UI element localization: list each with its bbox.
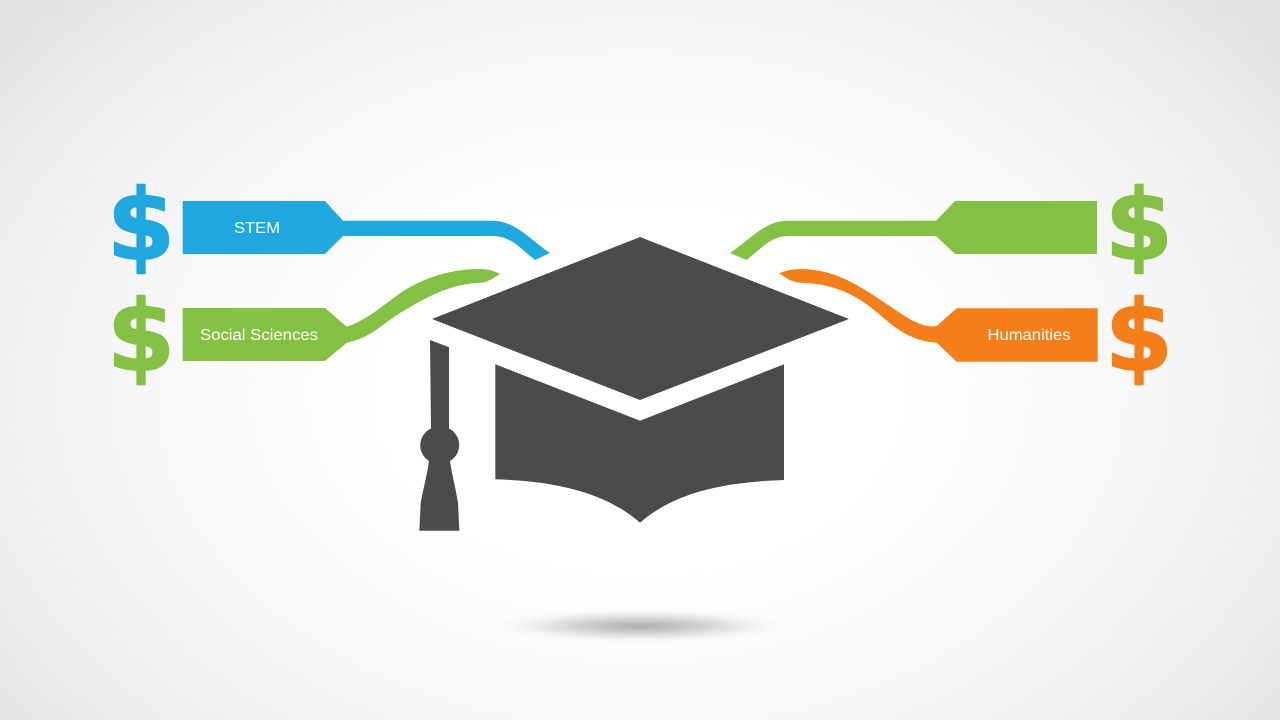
ground shadow [482, 609, 798, 643]
label: STEM: STEM [234, 220, 280, 237]
label: Social Sciences: Social Sciences [200, 327, 318, 344]
branch: unlabelled green [730, 169, 1173, 283]
icon: blue dollar sign: $ [107, 169, 175, 283]
icon: orange dollar sign: $ [1105, 280, 1173, 394]
cap top board [432, 237, 849, 400]
graduation cap [419, 237, 849, 531]
branch: STEM [107, 169, 550, 283]
orange tag and connector [779, 269, 1098, 362]
branch: Social Sciences [107, 269, 500, 394]
blue tag and connector [183, 201, 550, 260]
branch: Humanities [779, 269, 1173, 394]
cap body [495, 364, 784, 523]
tassel [419, 340, 459, 531]
green tag and connector [183, 269, 500, 361]
green tag and connector right [730, 201, 1097, 260]
icon: green dollar sign: $ [107, 280, 175, 394]
label: Humanities: Humanities [988, 327, 1070, 344]
icon: green dollar sign right: $ [1105, 169, 1173, 283]
